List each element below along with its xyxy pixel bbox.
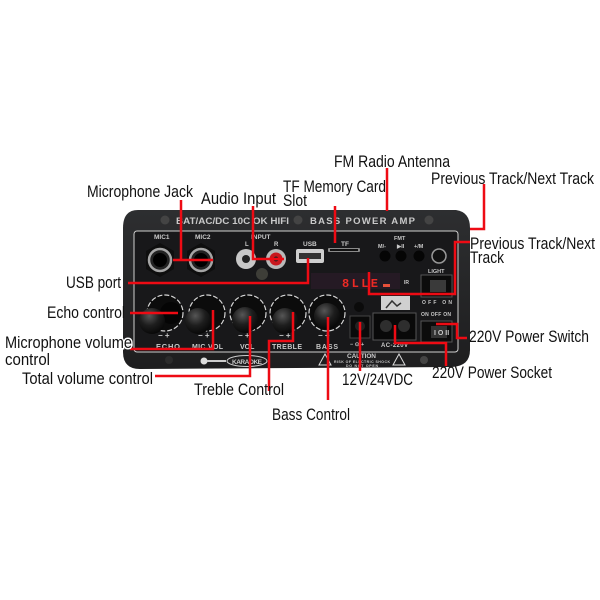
LED display: [311, 273, 409, 291]
echo knob: [139, 295, 183, 351]
DC power socket: [350, 302, 370, 348]
label: 12V/24VDC: 12V/24VDC: [342, 371, 413, 389]
caution label: RISK OF ELECTRIC SHOCK: [334, 360, 390, 364]
label: TF Memory Card Slot: [283, 178, 386, 210]
bass knob: BASS: [316, 344, 338, 351]
audio input RCA: L: [245, 242, 249, 248]
treble knob: − +: [279, 331, 291, 340]
label: FM Radio Antenna: FM Radio Antenna: [334, 153, 451, 171]
label: Microphone Jack: Microphone Jack: [87, 183, 194, 201]
callout leaders: [128, 168, 484, 400]
caution label: [319, 353, 405, 368]
leader: microphone jack: [173, 200, 213, 260]
power switch: [421, 312, 452, 342]
header text left: BAT/AC/DC 10C OK HIFI: [176, 216, 289, 227]
echo knob: ECHO: [156, 342, 180, 351]
mic vol knob: − +: [198, 331, 210, 340]
leader: previous/next top: [470, 184, 484, 229]
microphone jack MIC1: [146, 234, 174, 277]
AC power socket: AC-220V: [381, 343, 408, 349]
treble knob: TREBLE: [272, 344, 302, 351]
label: Bass Control: Bass Control: [272, 406, 350, 424]
bass knob: − +: [318, 331, 330, 340]
microphone jack MIC1: MIC1: [154, 234, 170, 241]
battery icon: [381, 296, 410, 310]
TF slot: [328, 241, 360, 252]
label: TF Memory Card Slot: Slot: [283, 192, 307, 210]
USB port: [296, 241, 324, 263]
AC power socket: [373, 313, 416, 349]
vol knob: [230, 295, 266, 351]
LED display: 8LLE: [342, 277, 378, 291]
leader: echo: [130, 312, 178, 314]
DC power socket: − ⊙ +: [350, 342, 364, 348]
panel body: [123, 210, 470, 369]
leader: 12V/24VDC: [359, 322, 361, 371]
audio input RCA: [236, 234, 286, 280]
caution label: DO NOT OPEN: [346, 364, 378, 368]
audio input RCA: R: [274, 242, 279, 248]
leader: power socket: [395, 325, 446, 366]
track buttons: +/M: [414, 244, 424, 250]
leader: power switch: [436, 324, 467, 338]
leader: bass: [327, 317, 329, 400]
TF slot: TF: [341, 241, 349, 248]
leader: previous/next side: [369, 242, 470, 294]
label: Microphone volume control: [5, 334, 132, 369]
label: Audio Input: Audio Input: [201, 190, 276, 208]
track buttons: ▶II: [396, 243, 405, 250]
volume knobs: [139, 295, 345, 351]
label: Microphone volume control: control: [5, 351, 50, 369]
light switch: OFF ON: [422, 300, 452, 306]
karaoke logo: KARAOKE: [232, 359, 263, 366]
label: Previous Track/Next Track side: Track: [470, 249, 505, 267]
mic vol knob: MIC VOL: [192, 344, 224, 351]
treble knob: [270, 295, 306, 351]
power switch: ON OFF ON: [421, 312, 451, 318]
leader: audio input: [253, 206, 284, 259]
label: Total volume control: Total volume control: [22, 370, 153, 388]
microphone jack MIC2: MIC2: [195, 234, 211, 241]
light switch: [421, 269, 452, 306]
USB port: USB: [303, 241, 317, 248]
leader: TF slot: [334, 206, 336, 243]
amplifier panel: [123, 210, 470, 369]
label: Treble Control: Treble Control: [194, 381, 284, 399]
mounting screws: [160, 216, 434, 364]
caution label: CAUTION: [347, 353, 376, 360]
vol knob: − +: [238, 331, 250, 340]
leader: total volume: [155, 316, 250, 376]
track buttons: [378, 236, 446, 263]
inner frame: [134, 231, 458, 352]
mic vol knob: [185, 295, 225, 351]
bass knob: [309, 295, 345, 351]
vol knob: VOL: [240, 344, 255, 351]
power switch: I O II: [434, 330, 449, 337]
label: Previous Track/Next Track side: [470, 235, 595, 267]
track buttons: FMT: [394, 236, 406, 242]
label: USB port: USB port: [66, 274, 121, 292]
track buttons: M/-: [378, 244, 386, 250]
label: TF Memory Card Slot: TF Memory Card: [283, 178, 386, 196]
LED display: IR: [404, 280, 409, 286]
audio input RCA: INPUT: [251, 234, 271, 241]
leader: USB port: [128, 258, 308, 283]
leader: FM antenna: [386, 168, 388, 211]
label: Echo control: Echo control: [47, 304, 125, 322]
header text right: BASS POWER AMP: [310, 216, 416, 227]
label: Microphone volume control: Microphone volume: [5, 334, 132, 352]
light switch: LIGHT: [428, 269, 445, 275]
label: 220V Power Socket: 220V Power Socket: [432, 364, 552, 382]
echo knob: − +: [158, 331, 170, 340]
leader: microphone volume: [130, 310, 213, 349]
karaoke logo: [200, 356, 267, 366]
leader: treble: [269, 312, 293, 391]
microphone jack MIC2: [187, 234, 215, 277]
